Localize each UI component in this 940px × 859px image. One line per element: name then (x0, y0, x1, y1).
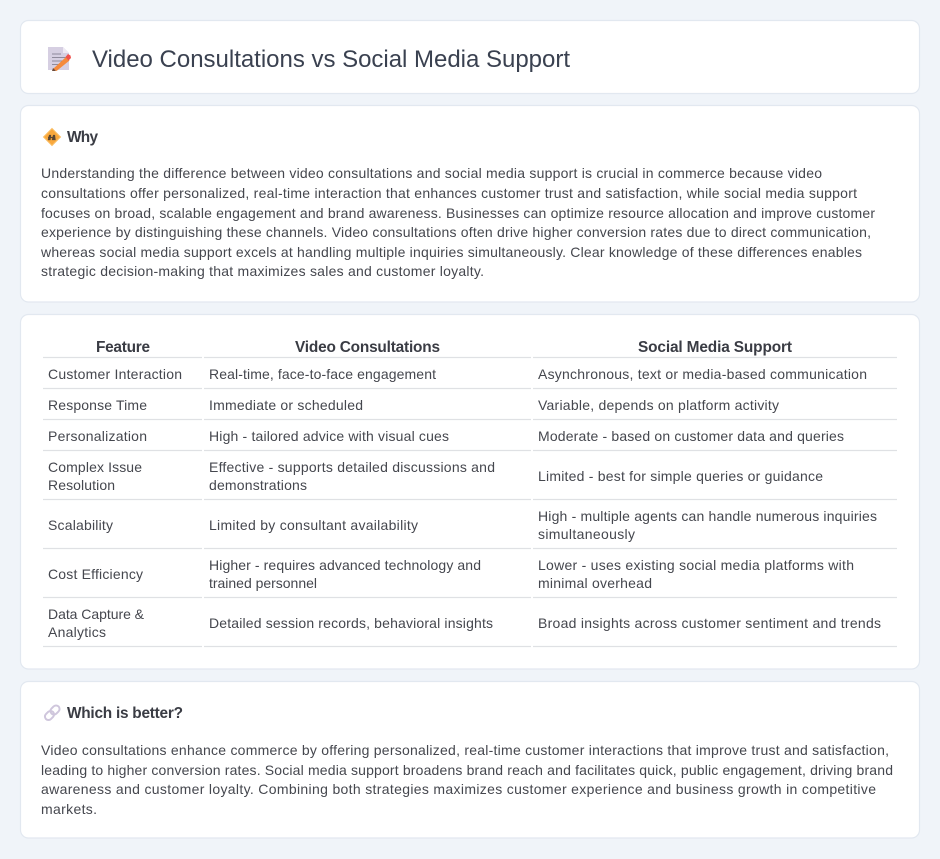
row: cost efficiency: trained personnel (209, 575, 317, 591)
text block: which is better paragraph: Video consultations enhance commerce by offering personalized, real-time customer interactions that improve trust and satisfaction, (41, 742, 889, 758)
text block: which is better paragraph (41, 742, 893, 817)
row: data capture and analytics: Data Capture & (48, 606, 145, 622)
panel: why (20, 106, 920, 302)
heading: why: Why (67, 129, 98, 146)
row: personalization: High - tailored advice with visual cues (209, 428, 449, 444)
panel: which is better (20, 682, 920, 838)
heading: which is better: Which is better? (67, 705, 183, 722)
text block: which is better paragraph: markets. (41, 801, 97, 817)
text block: why paragraph: focuses on broad, scalable engagement and brand awareness. Businesses can optimize resource allocation and improve customer (41, 205, 875, 221)
row: response time (48, 397, 779, 413)
row: data capture and analytics: Broad insights across customer sentiment and trends (538, 615, 881, 631)
text block: why paragraph (40, 165, 875, 279)
row: response time: Immediate or scheduled (209, 397, 363, 413)
row: data capture and analytics: Analytics (48, 624, 106, 640)
row: personalization (48, 428, 844, 444)
row: scalability: Limited by consultant availability (209, 517, 418, 533)
panel: header (20, 20, 920, 94)
row: response time: Variable, depends on platform activity (538, 397, 779, 413)
row: cost efficiency: minimal overhead (538, 575, 652, 591)
row: complex issue resolution (48, 459, 823, 493)
row: personalization: Moderate - based on customer data and queries (538, 428, 844, 444)
row: complex issue resolution: Resolution (48, 477, 115, 493)
row: customer interaction: Customer Interaction (48, 366, 182, 382)
table header row: Social Media Support (638, 339, 792, 356)
row: cost efficiency: Lower - uses existing social media platforms with (538, 557, 854, 573)
row: scalability: High - multiple agents can handle numerous inquiries (538, 508, 877, 524)
row: customer interaction: Asynchronous, text or media-based communication (538, 366, 867, 382)
row: data capture and analytics: Detailed session records, behavioral insights (209, 615, 493, 631)
row: complex issue resolution: demonstrations (209, 477, 307, 493)
row: complex issue resolution: Complex Issue (48, 459, 142, 475)
text block: why paragraph: Understanding the difference between video consultations and social media support is crucial in commerce because video (41, 165, 822, 181)
table header row: Video Consultations (295, 339, 440, 356)
icon: chain link (43, 704, 61, 722)
row: complex issue resolution: Effective - supports detailed discussions and (209, 459, 495, 475)
row: complex issue resolution: Limited - best for simple queries or guidance (538, 468, 823, 484)
row: cost efficiency: Cost Efficiency (48, 566, 143, 582)
text block: which is better paragraph: leading to higher conversion rates. Social media support broadens brand reach and facilitates quick, public engagement, driving brand (41, 762, 893, 778)
row: data capture and analytics (48, 606, 881, 640)
text block: why paragraph: strategic decision-making that maximizes sales and customer loyalty. (41, 263, 484, 279)
table header row (96, 339, 792, 356)
row: customer interaction (48, 366, 867, 382)
text block: why paragraph: consultations offer personalized, real-time interaction that enhances customer trust and satisfaction, while social media support (41, 185, 857, 201)
icon: memo with pencil (48, 47, 71, 71)
row: personalization: Personalization (48, 428, 147, 444)
text block: why paragraph: whereas social media support excels at handling multiple inquiries simultaneously. Clear knowledge of these differences enables (40, 244, 862, 260)
row: cost efficiency: Higher - requires advanced technology and (209, 557, 481, 573)
row: response time: Response Time (48, 397, 147, 413)
panel: comparison table (20, 314, 920, 669)
text block: which is better paragraph: awareness and customer loyalty. Combining both strategies maximizes customer experience and business growth in competitive (41, 781, 876, 797)
title: Video Consultations vs Social Media Support (92, 46, 570, 73)
row: customer interaction: Real-time, face-to-face engagement (209, 366, 436, 382)
table header row: Feature (96, 339, 150, 356)
text block: why paragraph: experience by distinguishing these channels. Video consultations often drive higher conversion rates due to direct communication, (41, 224, 871, 240)
row: scalability (48, 508, 877, 542)
row: scalability: simultaneously (538, 526, 635, 542)
row: cost efficiency (48, 557, 854, 591)
icon: diamond sign (44, 128, 60, 146)
row: scalability: Scalability (48, 517, 113, 533)
